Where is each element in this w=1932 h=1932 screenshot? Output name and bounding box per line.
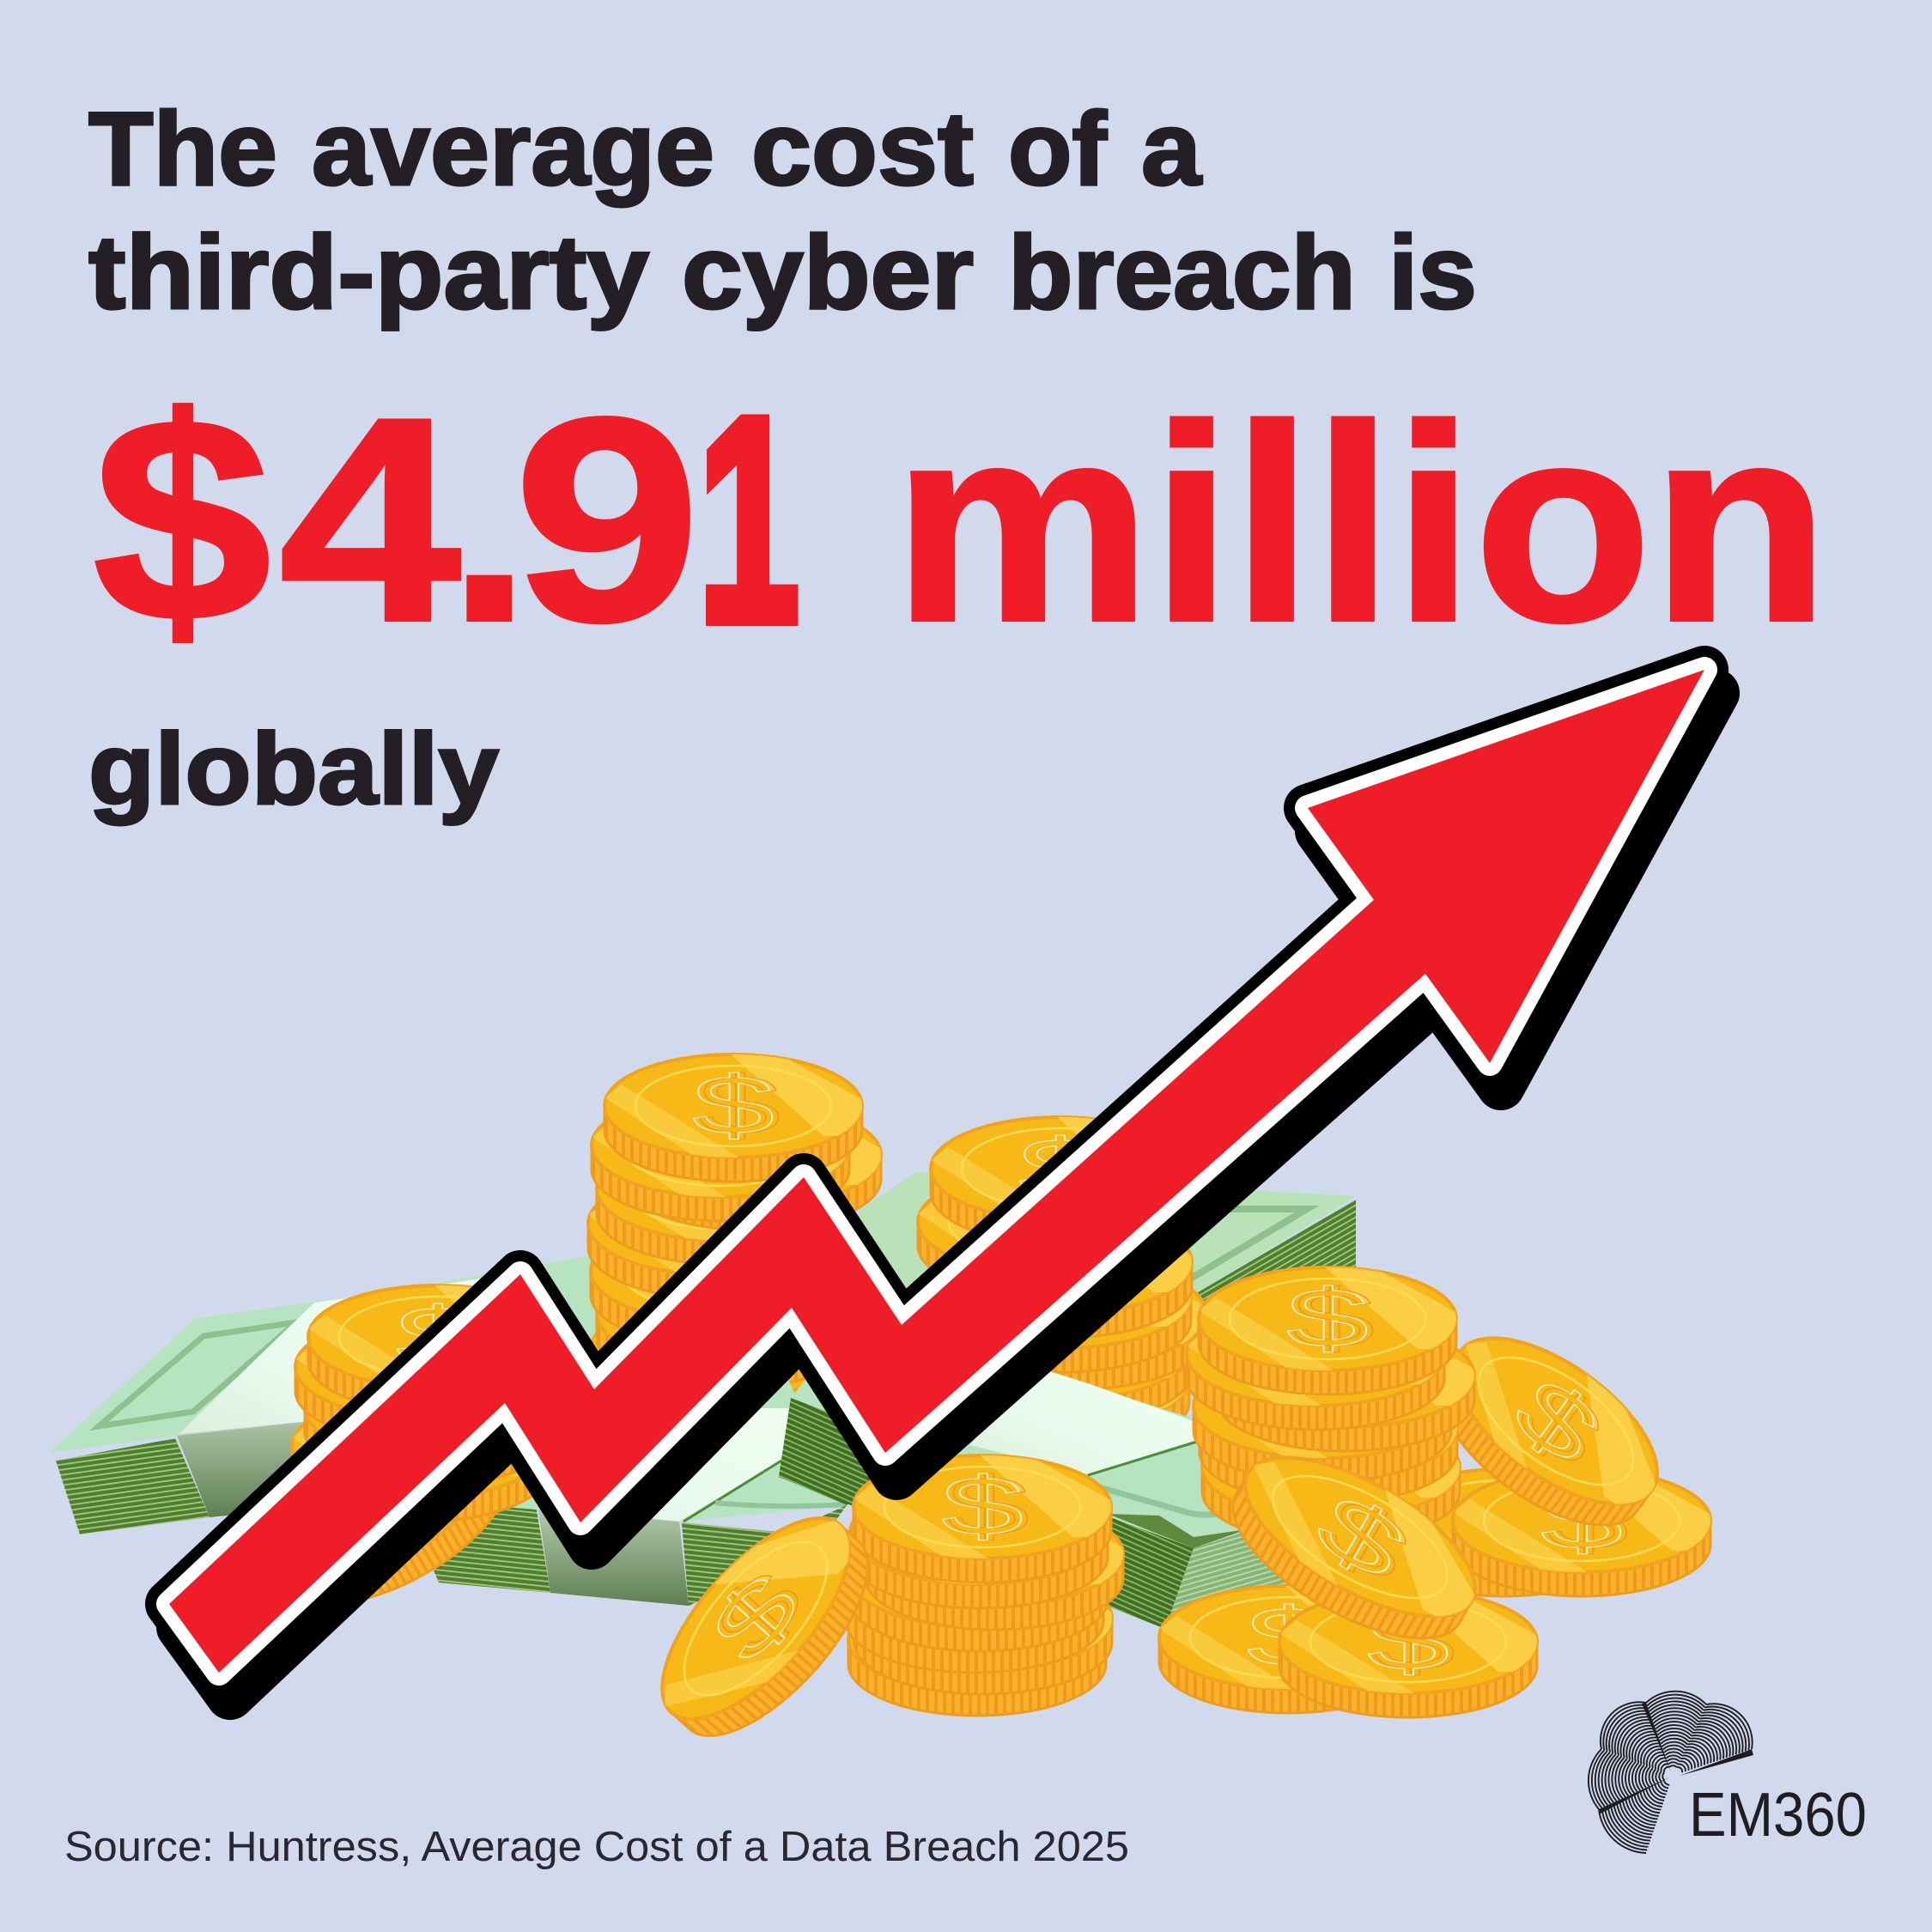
coin stack: right: $ xyxy=(1292,1272,1375,1364)
coin stack: left xyxy=(252,1284,570,1634)
source line: Source: Huntress, Average Cost of a Data Breach 2025 xyxy=(64,1824,1129,1870)
big statistic: $ xyxy=(93,357,271,682)
coins: bottom right group: $ xyxy=(1247,1590,1329,1683)
coin stack: front centre xyxy=(846,1454,1127,1716)
qualifier: globally: globally xyxy=(88,713,499,826)
coin stack: left: $ xyxy=(396,1290,478,1382)
coin stack: right: $ xyxy=(1286,1272,1369,1364)
heading line 2: cyber xyxy=(682,214,974,331)
coin stack: tall back: $ xyxy=(692,1059,775,1151)
EM360 logo xyxy=(1589,1692,1867,1853)
big statistic: 9 xyxy=(513,357,701,682)
coins: bottom right group: $ xyxy=(1367,1595,1449,1687)
tilted coin: front left: $ xyxy=(693,1556,817,1680)
heading line 2: is xyxy=(1388,214,1477,331)
coin stack: front centre: $ xyxy=(941,1460,1024,1552)
coin stack: behind arrow: $ xyxy=(1018,1121,1101,1214)
tilted coin: front left xyxy=(630,1485,902,1765)
cash bundle: front right xyxy=(779,1314,1400,1629)
logo wordmark: EM360 xyxy=(1689,1781,1867,1850)
heading line 1: of xyxy=(1008,90,1107,207)
rising red arrow xyxy=(169,670,1716,1696)
coins: far right group: $ xyxy=(1497,1358,1616,1483)
coins: far right group: $ xyxy=(1501,1362,1620,1486)
coins: bottom right group xyxy=(1159,1425,1541,1717)
big statistic: 1 xyxy=(698,357,799,682)
heading line 2: third-party xyxy=(88,214,649,331)
coins: bottom right group: $ xyxy=(1301,1473,1420,1598)
heading line 1: The xyxy=(88,90,277,207)
coins: far right group xyxy=(1376,1305,1715,1596)
coin stack: behind arrow xyxy=(918,1115,1211,1454)
heading line 1: a xyxy=(1141,90,1202,207)
coin stack: tall back xyxy=(588,1053,885,1424)
logo mark: concentric arcs xyxy=(1589,1692,1753,1853)
heading line 2: breach xyxy=(1008,214,1356,331)
coin stack: tall back: $ xyxy=(698,1059,781,1151)
coin stack: right xyxy=(1187,1266,1479,1543)
coins: bottom right group: $ xyxy=(1306,1477,1425,1601)
coins: far right group: $ xyxy=(1546,1473,1629,1566)
cash bundle: back left xyxy=(49,1219,773,1534)
coin stack: front centre: $ xyxy=(947,1460,1030,1552)
cash bundle: front centre xyxy=(404,1374,902,1606)
coins: far right group: $ xyxy=(1540,1473,1623,1566)
heading line 1: cost xyxy=(751,90,974,207)
big statistic: . xyxy=(448,357,531,682)
heading line 1: average xyxy=(312,90,714,207)
coins: bottom right group: $ xyxy=(1373,1595,1455,1687)
big statistic: 4 xyxy=(279,357,463,682)
big statistic: million xyxy=(893,368,1829,679)
illustration: money and coins xyxy=(49,1053,1715,1765)
tilted coin: front left: $ xyxy=(696,1552,822,1675)
cash bundle: back right xyxy=(859,1172,1356,1374)
